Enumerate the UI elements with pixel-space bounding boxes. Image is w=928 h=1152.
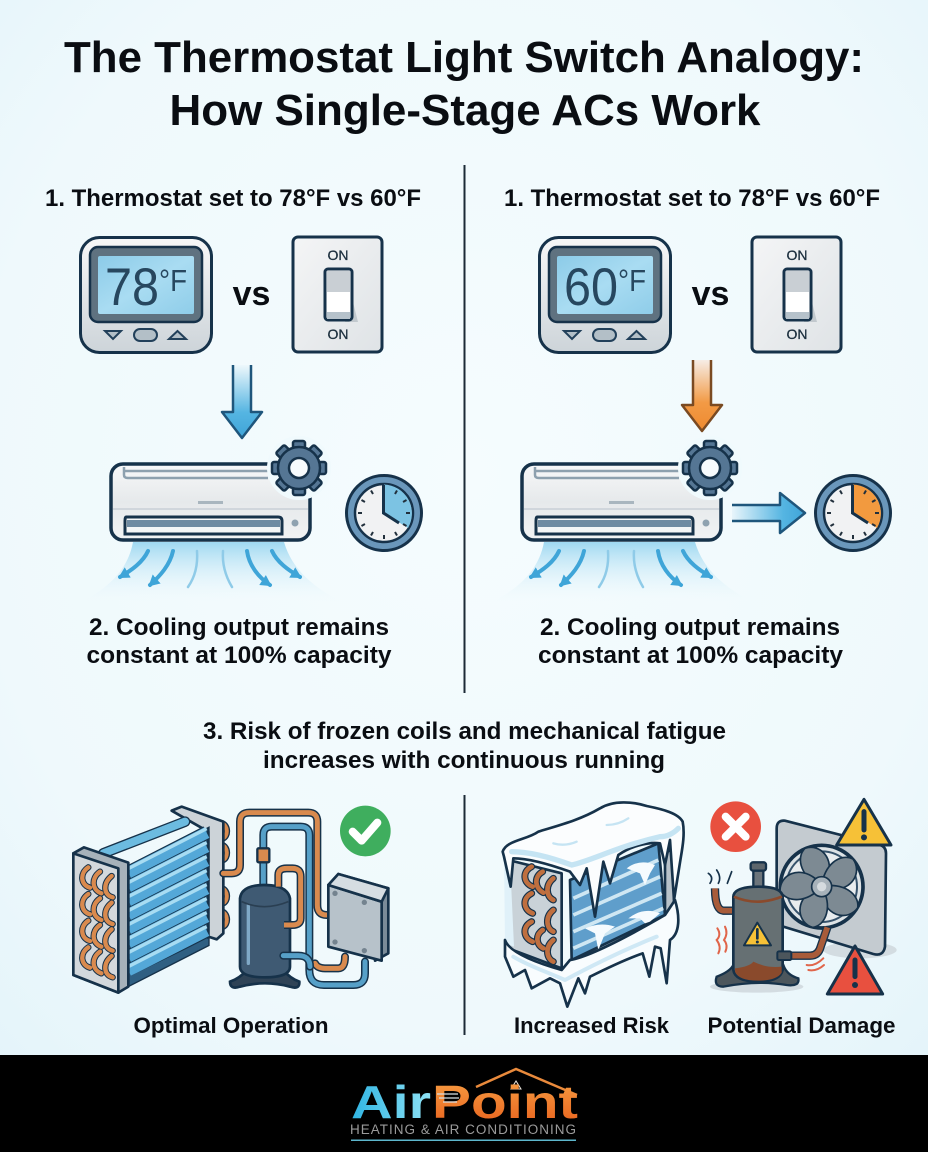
logo: AirPoint: HEATING & AIR CONDITIONING (350, 1122, 576, 1137)
icon: clock blue (346, 476, 422, 550)
coil body (504, 843, 675, 968)
icon: thermostat 60F (540, 238, 670, 352)
icon: light switch: ON (328, 326, 348, 342)
icon: thermostat 78F: °F (159, 263, 187, 298)
front plate with copper bends (73, 847, 128, 993)
icon: AC unit with airflow (494, 436, 751, 601)
icon: light switch: ON (786, 247, 808, 263)
heading: step 3: increases with continuous running (263, 747, 665, 774)
illustration: coil, compressor and control box (73, 806, 391, 993)
panel: 60F thermostat setting (494, 185, 890, 669)
text: step 2 left: 2. Cooling output remains (89, 614, 389, 641)
refrigerant pipes (223, 813, 365, 985)
yellow warning (837, 799, 891, 845)
back plate (172, 807, 227, 939)
panel: potential damage (708, 799, 897, 1038)
icon: thermostat 78F (80, 238, 212, 352)
logo: AirPoint (350, 1069, 578, 1141)
panel: optimal operation (73, 806, 391, 1038)
icon: thermostat 60F: °F (618, 263, 646, 298)
icon: AC unit with airflow (83, 436, 340, 601)
fan (777, 821, 897, 958)
heading: step 1 right: 1. Thermostat set to 78°F vs 60°F (504, 185, 880, 212)
panel: 78F thermostat setting (45, 185, 422, 669)
icon: red X (710, 801, 761, 852)
panel: increased risk (503, 802, 684, 1038)
arrow: blue down (222, 365, 262, 438)
label: potential damage: Potential Damage (708, 1013, 896, 1038)
heading: step 3: 3. Risk of frozen coils and mechanical fatigue (203, 718, 726, 745)
icon: light switch (293, 237, 382, 352)
text: step 2 right (538, 614, 843, 669)
vs label: vs (233, 275, 270, 313)
icon: thermostat 78F: 78 (105, 258, 159, 317)
label: increased risk: Increased Risk (514, 1013, 670, 1038)
vs label: vs (692, 275, 729, 313)
text: step 2 right: constant at 100% capacity (538, 642, 843, 669)
blue coil tubes (103, 822, 208, 987)
arrow: blue right (732, 493, 805, 533)
illustration: frozen coil (503, 802, 684, 1007)
title (64, 33, 864, 135)
footer band (0, 1055, 928, 1152)
bottom snow and icicles (505, 900, 678, 1007)
icon: thermostat 60F: 60 (564, 258, 618, 317)
text: step 2 left: constant at 100% capacity (86, 642, 392, 669)
control box (328, 874, 388, 961)
logo roof (476, 1069, 577, 1095)
logo: AirPoint: Air (351, 1076, 431, 1128)
icon: green check (340, 806, 391, 856)
title: The Thermostat Light Switch Analogy: (64, 33, 864, 82)
title: How Single-Stage ACs Work (170, 86, 761, 135)
text: step 2 left (86, 614, 392, 669)
top snow cap and icicles (503, 802, 684, 917)
illustration: damaged compressor and fan (708, 799, 897, 994)
compressor (230, 848, 310, 988)
icon: light switch (752, 237, 841, 352)
icon: light switch: ON (786, 326, 808, 342)
icon: light switch: ON (328, 247, 348, 263)
heading: step 3 (203, 718, 726, 774)
text: step 2 right: 2. Cooling output remains (540, 614, 840, 641)
heading: step 1 left: 1. Thermostat set to 78°F vs 60°F (45, 185, 421, 212)
arrow: orange down (682, 360, 722, 431)
label: optimal operation: Optimal Operation (134, 1013, 328, 1038)
logo: AirPoint: Point (432, 1076, 578, 1128)
red warning (827, 946, 883, 994)
compressor (708, 862, 827, 993)
icon: clock orange (816, 476, 890, 550)
